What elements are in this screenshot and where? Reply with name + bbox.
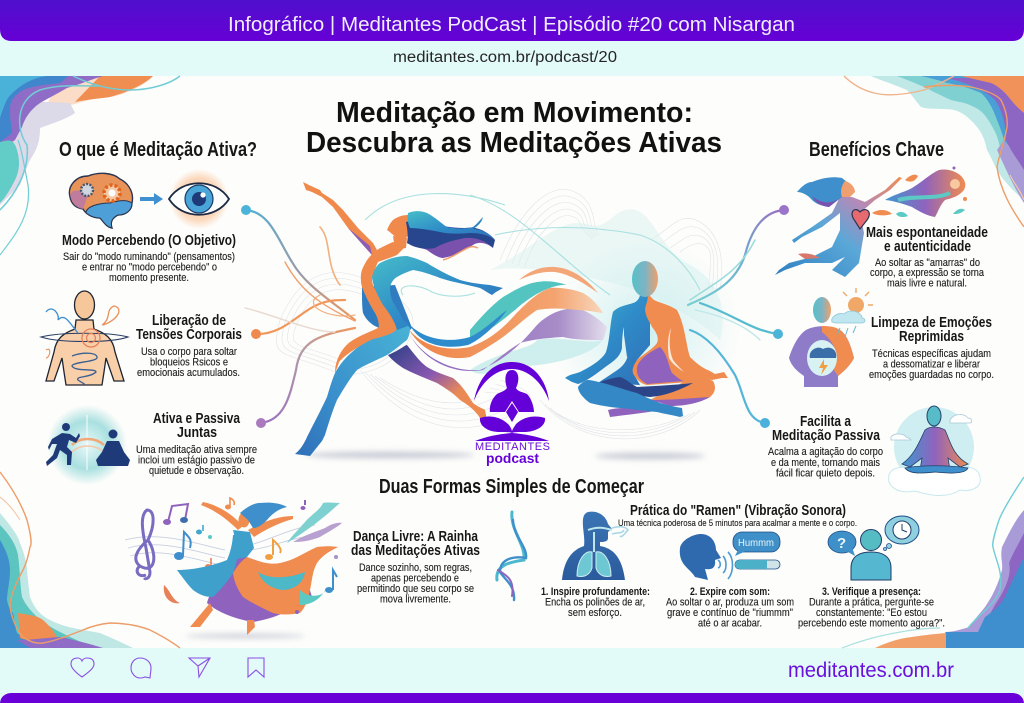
icon: brain with gears (69, 173, 132, 228)
corner decoration: top right (844, 76, 1024, 227)
splash teal stroke (898, 193, 950, 200)
connector dot: purple right (779, 205, 789, 215)
subheading: Facilita a (800, 414, 852, 430)
icon: heart (71, 658, 94, 677)
dress teal (258, 572, 305, 590)
description: Sair do "modo ruminando" (pensamentos) (63, 251, 235, 263)
icon: send (189, 658, 210, 677)
heart (852, 210, 869, 229)
subheading (351, 529, 480, 559)
dancer arms (201, 502, 293, 537)
heading: Benefícios Chave (809, 139, 944, 161)
music notes (163, 498, 337, 593)
intro text: Uma técnica poderosa de 5 minutos para acalmar a mente e o corpo. (618, 518, 857, 529)
description: a dessomatizar e liberar (883, 358, 980, 370)
panel: Facilita a Meditação Passiva (768, 406, 980, 496)
icon: leaping figure (775, 166, 967, 277)
step 2: Ao soltar o ar, produza um som (666, 596, 794, 608)
description: mais livre e natural. (887, 278, 967, 290)
head (387, 215, 412, 238)
shadow under dancer (305, 452, 475, 458)
description: fácil ficar quieto depois. (776, 468, 875, 480)
hair purple (812, 196, 840, 207)
description: e entrar no "modo percebendo" o (82, 262, 217, 274)
main title: Meditação em Movimento: (336, 97, 693, 129)
dress orange (233, 546, 338, 614)
header bar (0, 0, 1024, 41)
hair main (408, 211, 495, 240)
background line waves (277, 189, 722, 439)
icon: figure with storm cloud (789, 288, 873, 387)
icon: person checking presence (828, 516, 919, 580)
figure: seated meditator (519, 261, 728, 460)
section heading: Duas Formas: Duas Formas Simples de Começar (379, 476, 644, 498)
front leg (388, 345, 488, 425)
description: emoções guardadas no corpo. (869, 369, 994, 381)
arm shade (348, 228, 372, 255)
teal thin wave lines (365, 194, 700, 296)
description: permitindo que seu corpo se (357, 583, 474, 595)
subheading: Ativa e Passiva (153, 411, 241, 427)
description: Dance sozinho, som regras, (359, 562, 472, 574)
connector lines left (245, 210, 355, 423)
icon: eye (169, 169, 229, 229)
heading: O que é Meditação Ativa? (59, 139, 257, 161)
step 1 (541, 586, 650, 619)
icon: speaking head (680, 532, 780, 580)
icon: body with spirals (41, 291, 128, 385)
corner decoration: top left (0, 76, 180, 255)
subheading: Mais espontaneidade (866, 225, 988, 241)
step 2: até o ar acabar. (698, 618, 762, 630)
subheading (136, 313, 242, 343)
dancer head (238, 512, 250, 528)
description: mova livremente. (380, 594, 451, 606)
raised arm (303, 182, 377, 255)
torso base (362, 285, 412, 340)
flying swirls (287, 503, 340, 543)
sound bar (735, 560, 780, 569)
divider swirl (497, 512, 526, 600)
subheading (871, 315, 992, 345)
dancer torso (232, 530, 254, 560)
treble clef (136, 510, 154, 579)
step 3: constantemente: "Eo estou (816, 607, 927, 619)
color splash (885, 169, 965, 217)
connector lines right (688, 210, 784, 423)
subheading: Modo Percebendo (O Objetivo) (62, 233, 236, 249)
subheading (153, 411, 241, 441)
step 3: 3. Verifique a presença: (822, 586, 921, 598)
description: Técnicas específicas ajudam (872, 348, 991, 360)
figure body (775, 177, 902, 277)
description (357, 562, 474, 606)
panel: Prática do Ramen (541, 503, 945, 630)
hair purple underside (407, 232, 493, 258)
description: e da mente, tornando mais (771, 457, 880, 469)
panel: Benefícios Chave (775, 139, 988, 290)
main title: Descubra as Meditações Ativas (306, 127, 722, 159)
subheading: Meditação Passiva (772, 428, 881, 444)
connector dot: purple (256, 418, 266, 428)
neck and blue upper body (565, 294, 650, 385)
subheading: Reprimidas (899, 329, 964, 345)
orange torso ribbon (335, 242, 405, 373)
icon: bookmark (248, 658, 264, 677)
logo subtitle: podcast (486, 450, 539, 466)
description: Uma meditação ativa sempre (136, 444, 257, 456)
question mark: ? (837, 535, 846, 552)
step 3: Durante a prática, pergunte-se (809, 596, 934, 608)
arrow (140, 193, 163, 205)
hair strand orange (443, 247, 478, 260)
subheading: Juntas (177, 425, 217, 441)
head (841, 181, 855, 197)
bottom bar (0, 693, 1024, 703)
head (632, 261, 658, 297)
orange leg (650, 378, 715, 405)
navy lap (598, 377, 693, 397)
logo wordmark: MEDITANTES (475, 441, 550, 453)
subheading (772, 414, 881, 444)
icon: musical dancer (125, 498, 342, 638)
subheading (866, 225, 988, 255)
main title (306, 97, 722, 159)
dancer hair (240, 503, 287, 528)
blue chest and arm (372, 256, 503, 330)
hair dark (406, 220, 495, 249)
description: incloi um estágio passivo de (138, 454, 255, 466)
ribbon bands (408, 281, 607, 374)
step 2: 2. Expire com som: (690, 586, 770, 598)
panel: Liberação de Tensões Corporais (41, 291, 242, 385)
step 1: Encha os polinões de ar, (545, 596, 645, 608)
neck (393, 236, 407, 250)
description: Ao soltar as "amarras" do (875, 257, 980, 269)
hair (797, 177, 847, 207)
description: quietude e observação. (149, 465, 244, 477)
description (136, 444, 257, 477)
icon: lungs (562, 512, 628, 580)
logo: Meditantes podcast (474, 362, 550, 466)
icon: active and passive (46, 405, 130, 485)
shadow (595, 452, 705, 460)
step 2: grave e contínuo de "riummm" (667, 607, 793, 619)
connector dot: blue (241, 205, 251, 215)
splash droplets (872, 175, 918, 215)
icon: meditator on cloud (889, 406, 980, 496)
description: emocionais acumulados. (137, 367, 240, 379)
rear leg (295, 320, 410, 456)
subheading: Dança Livre: A Rainha (353, 529, 479, 545)
speech text: Hummm (738, 537, 774, 549)
subheading: das Meditações Ativas (351, 543, 480, 559)
connector dot: lower right (760, 418, 770, 428)
connector dot: orange (251, 329, 261, 339)
subheading: Limpeza de Emoções (871, 315, 992, 331)
panel: Ativa e Passiva Juntas (46, 405, 257, 485)
purple cushion (608, 408, 660, 417)
inner arm gap (668, 328, 684, 372)
header url: meditantes.com.br/podcast/20 (393, 49, 617, 66)
subheading: Prática do "Ramen" (Vibração Sonora) (630, 503, 846, 519)
panel: Limpeza de Emoções Reprimidas (789, 288, 994, 387)
step 3 (798, 586, 945, 630)
panel: O que é Meditação Ativa (59, 139, 257, 284)
icon: comment (131, 658, 151, 678)
description (870, 257, 984, 290)
description (869, 348, 994, 381)
orange arc (519, 267, 598, 293)
connector dot: blue right (773, 329, 783, 339)
header title: Infográfico | Meditantes PodCast | Episódio #20 com Nisargan (228, 14, 795, 36)
description: bloqueios Rsicos e (150, 356, 228, 368)
subheading: Tensões Corporais (136, 327, 242, 343)
teal wave backdrop (490, 209, 723, 340)
description: Acalma a agitação do corpo (768, 446, 883, 458)
step 2 (666, 586, 794, 630)
clock bubble (884, 516, 919, 550)
glow behind meditator (550, 240, 740, 420)
subheading: e autenticidade (884, 239, 971, 255)
description (137, 346, 240, 379)
blue front leg (578, 380, 683, 417)
shadow (185, 634, 305, 638)
staff lines (125, 525, 315, 566)
corner decoration: bottom right (842, 477, 1024, 648)
description: Usa o corpo para soltar (141, 346, 237, 358)
orange upper body (633, 294, 728, 385)
rear foot shade (798, 253, 820, 259)
description (63, 251, 235, 284)
description: momento presente. (109, 272, 189, 284)
dress purple (207, 555, 313, 622)
splash highlight (950, 179, 960, 189)
footer url: meditantes.com.br (788, 659, 954, 682)
purple belly (637, 347, 684, 384)
social icons footer (71, 658, 264, 678)
description: apenas percebendo e (371, 572, 459, 584)
purple under leg (652, 397, 710, 406)
description: corpo, a expressão se torna (870, 267, 984, 279)
corner decoration: bottom left (0, 472, 180, 648)
dress blue (177, 535, 240, 597)
step 1: 1. Inspire profundamente: (541, 586, 650, 598)
description (768, 446, 883, 480)
panel: Dança Livre (351, 529, 480, 606)
step 1: sem esforço. (568, 607, 622, 619)
dancer legs (190, 603, 255, 635)
figure: flowing dancer (295, 182, 607, 458)
step 3: percebendo este momento agora?". (798, 618, 945, 630)
subheading: Liberação de (152, 313, 226, 329)
